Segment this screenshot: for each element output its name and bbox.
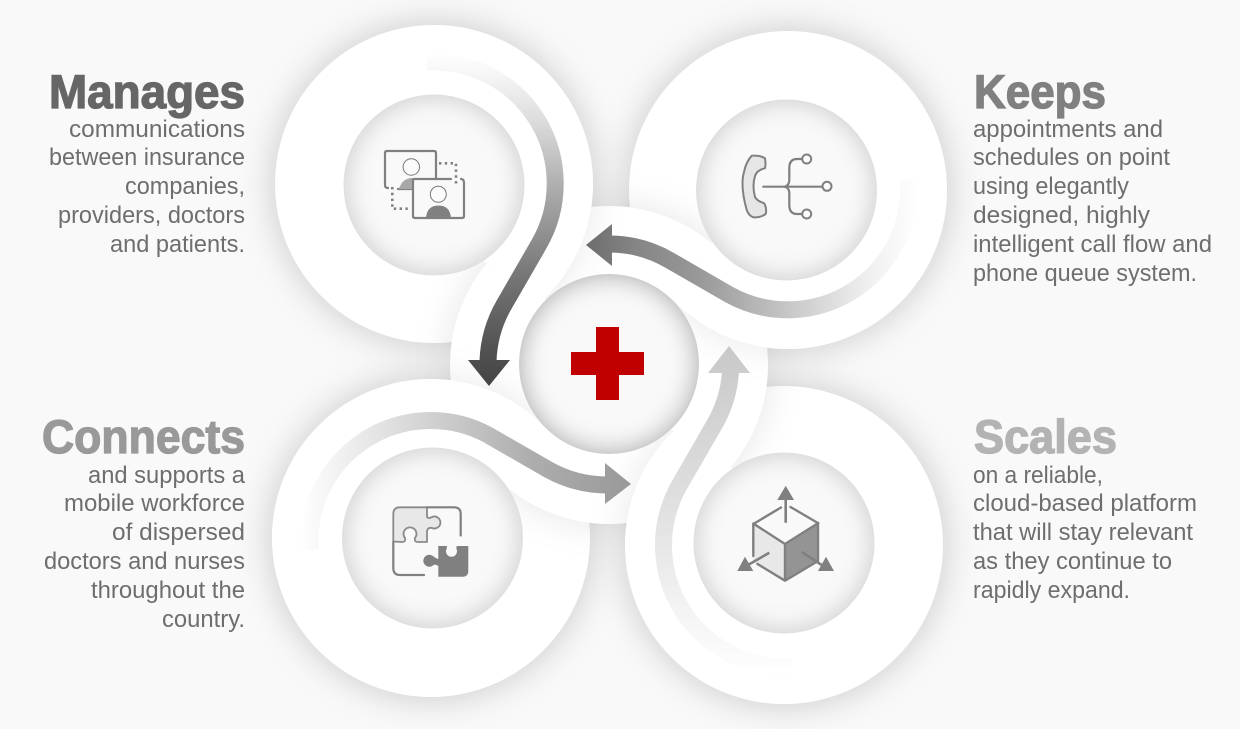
body: Manages: between insurance [49,144,245,171]
body: Connects: doctors and nurses [44,548,245,575]
body: Scales: on a reliable, [973,462,1103,489]
arrow: bottom-right lobe to centre [663,346,793,667]
inner well: bottom left [342,448,523,628]
body: Keeps: phone queue system. [973,260,1197,287]
panel: central white disc [450,206,768,524]
icon: red cross [571,327,644,400]
body: Keeps: designed, highly [973,202,1150,229]
body: Connects [44,462,246,633]
arrow: bottom-left lobe to centre [310,421,631,550]
body: Keeps: schedules on point [973,144,1170,171]
inner well: bottom right [694,452,874,634]
arrow: top-left lobe to centre [427,62,555,386]
text block: Manages [49,65,245,258]
body: Connects: mobile workforce [64,490,245,517]
body: Manages: and patients. [110,231,245,258]
icon: puzzle pieces [393,507,468,577]
heading: Keeps: Keeps [974,65,1106,118]
body: Keeps [973,116,1212,287]
body: Keeps: appointments and [973,116,1163,143]
inner well: top left [344,94,524,276]
text block: Connects [42,410,246,633]
heading: Manages: Manages [49,65,245,118]
heading: Connects: Connects [42,410,245,463]
arrow: top-right lobe to centre [586,180,909,310]
body: Connects: of dispersed [112,519,245,546]
panel: four outer white circles [272,25,947,704]
body: Keeps: using elegantly [973,173,1129,200]
body: Connects: country. [162,606,245,633]
body: Scales [973,462,1197,604]
body: Manages: communications [69,116,245,143]
text block: Keeps [973,65,1212,287]
heading: Scales: Scales [974,410,1117,463]
icon: phone call flow [743,154,832,218]
body: Manages: companies, [125,173,245,200]
panel: lobes merging into the central disc [393,107,808,572]
icon: scaling cube [737,486,834,581]
body: Keeps: intelligent call flow and [973,231,1212,258]
panel: lobe shadows falling on the central disc [450,207,768,524]
body: Scales: cloud-based platform [973,490,1197,517]
inner well: top right [696,100,877,280]
body: Manages [49,116,245,258]
icon: video profiles [385,151,464,218]
body: Scales: that will stay relevant [973,519,1193,546]
body: Connects: and supports a [88,462,246,489]
body: Scales: rapidly expand. [973,577,1130,604]
text block: Scales [973,410,1197,604]
body: Connects: throughout the [91,577,245,604]
body: Scales: as they continue to [973,548,1172,575]
inner well: centre [519,274,699,454]
body: Manages: providers, doctors [58,202,245,229]
